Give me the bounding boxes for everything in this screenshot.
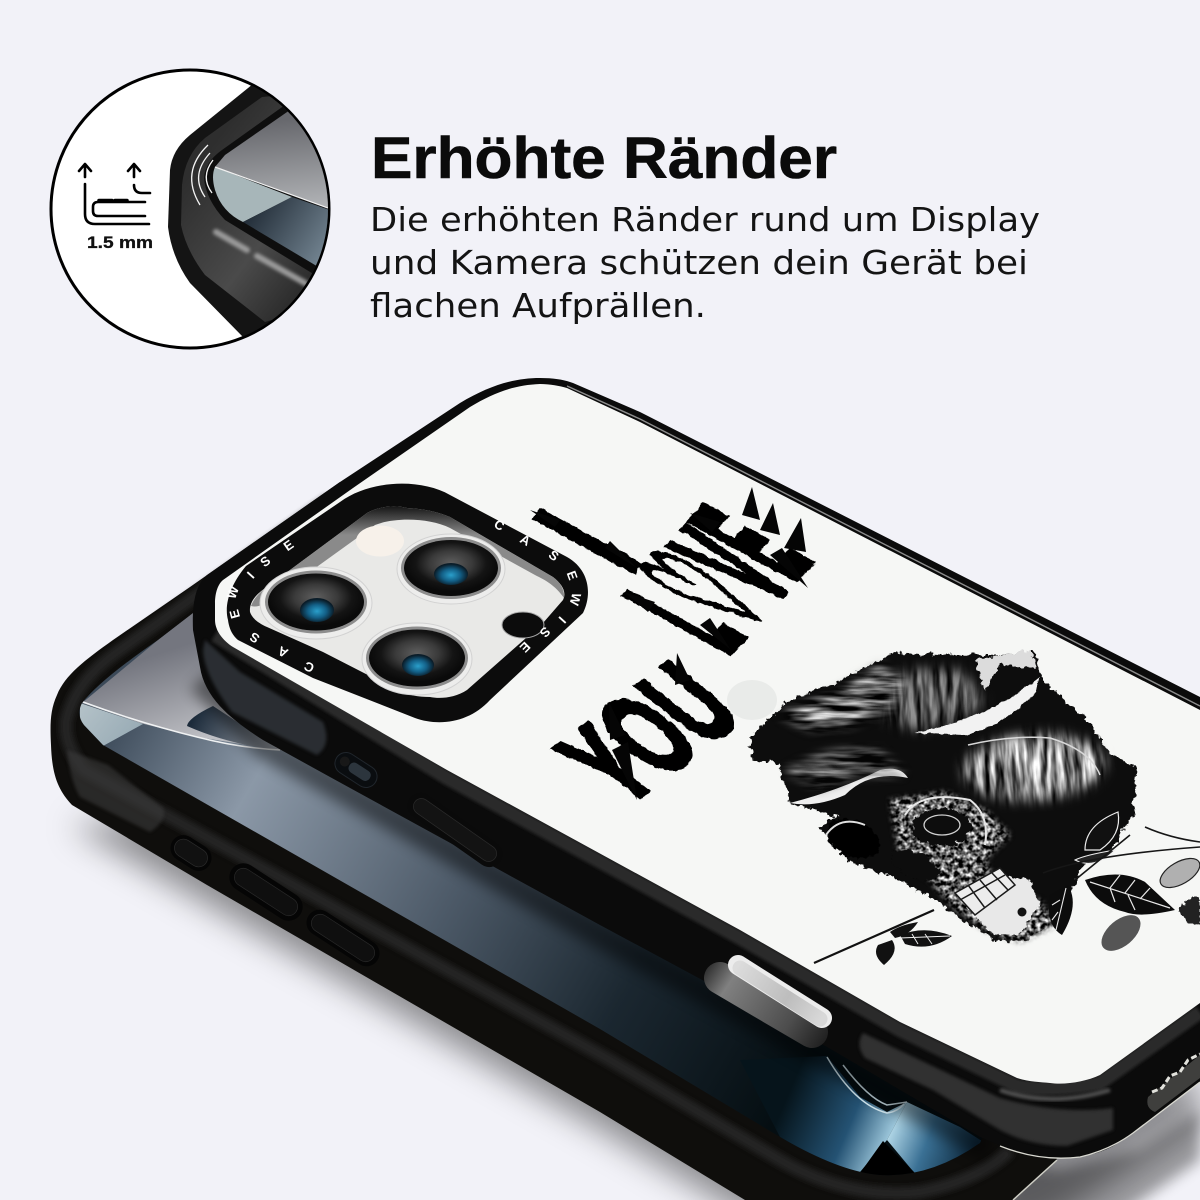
ring brand text: W [566,591,584,608]
front corner texture patch: bottom [859,1033,1113,1146]
back phone rim highlight [66,500,1010,1193]
button: power [165,830,217,876]
top petal fold [975,650,1036,690]
body text: Die erhöhten Ränder rund um Display [370,200,1040,239]
ring brand text: S [537,624,554,641]
second leaf [1049,885,1073,935]
light lower edge [1000,1082,1200,1158]
large petal highlight [962,730,1106,804]
lens: top [397,534,505,604]
back phone corner texture patch [67,750,164,832]
front bumper inner rim [215,635,1200,1088]
ring brand text: A [275,643,291,661]
camera ring outer [227,484,588,722]
inset circle: raised edge close-up [51,70,340,348]
ring brand text: E [517,639,534,656]
measurement label: 1.5 mm [87,233,153,252]
skull nostril [1018,908,1026,916]
fallen petals [1102,915,1140,951]
rose silhouette [750,650,1137,942]
artwork: lettering: YOU [530,641,768,826]
body text: flachen Aufprällen. [370,286,706,325]
ring brand text: E [281,536,297,554]
ring brand text: S [247,629,262,646]
ring brand text: C [301,658,317,676]
ring brand text: A [517,531,534,549]
ring brand text: I [556,614,569,626]
button: volume up [224,858,308,926]
button: volume down [302,905,384,971]
lower petal highlight [790,769,908,804]
ring brand text: E [564,569,581,582]
top edge highlight [567,386,1200,706]
front corner texture patch: camera side [203,640,326,755]
artwork: lettering: L♡VE [593,486,844,673]
front phone [193,378,1200,1158]
lens: bottom [362,623,472,695]
bumper highlight [1000,1090,1110,1099]
inset phone corner [168,82,340,337]
front phone bumper [193,378,1200,1158]
ring brand text [224,516,584,676]
ring brand text: I [244,569,257,581]
body text [370,200,1040,325]
drop shadow under phones [70,800,1200,1200]
artwork: rose and skull [750,650,1200,965]
petal contour [968,737,1100,775]
camera plateau [250,506,564,698]
outlined top leaf [1075,812,1119,863]
skull mouth dark [895,848,941,881]
icon: raised edge diagram [79,164,150,224]
large leaf [1085,874,1175,915]
phone back plate [215,384,1200,1084]
ring brand text: E [226,608,243,620]
ring brand text: S [257,553,274,570]
upper petals [780,665,905,730]
body text: und Kamera schützen dein Gerät bei [370,243,1028,282]
skull eye rose [913,808,971,846]
small leaves on stem [876,922,952,965]
front phone shadow on screen [200,680,990,1150]
artwork: lettering [498,486,844,826]
rose stems [1043,827,1200,880]
heading: Erhöhte Ränder [371,126,837,191]
button: front side key [402,788,508,872]
artwork: lettering spikes [530,487,808,800]
camera ring inner wall [251,506,564,607]
back phone [51,480,1057,1200]
lidar dot [502,612,544,638]
skull nose [827,816,880,860]
impact arcs [192,145,213,205]
back phone screen [79,613,981,1176]
front phone speaker cutout [1147,1054,1200,1112]
ring brand text: W [224,583,242,601]
artwork: lettering: I [498,486,679,598]
lens: left [260,567,372,639]
ring brand text: S [546,547,562,564]
white petal streak [915,677,1040,735]
skull [890,792,1056,942]
ring brand text: C [491,516,508,534]
camera module [224,484,588,722]
logo ghost [727,680,777,720]
flash [356,526,404,556]
shadow beneath front phone corner [1000,1110,1200,1200]
back phone bumper [51,482,1057,1200]
button: silent cutout [331,748,381,792]
skull teeth [955,868,1015,915]
silver side button [720,965,822,1032]
